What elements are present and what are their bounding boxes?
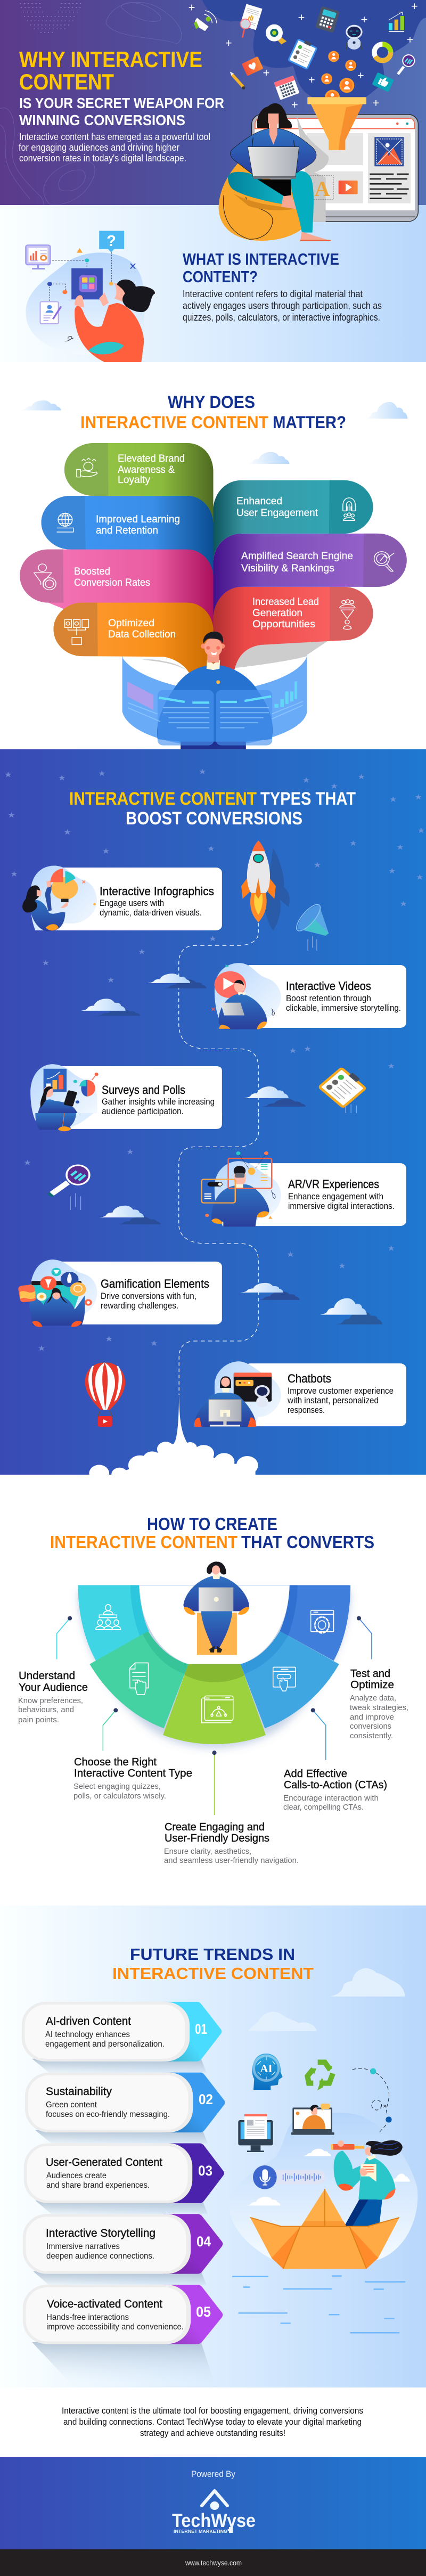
pill 05 text: improve accessibility and convenience.	[46, 2323, 184, 2332]
ribbon: optimized data	[54, 603, 214, 673]
card: ar vr experiences	[202, 1151, 406, 1226]
ribbon labels: Boosted	[74, 566, 110, 577]
text: what is body	[183, 289, 382, 323]
pill 02 text	[46, 2086, 213, 2119]
heading: what is	[183, 250, 339, 286]
step: understand your audience: pain points.	[18, 1715, 59, 1724]
panel: future trends	[0, 1906, 426, 2387]
ribbon labels	[74, 453, 353, 640]
panel: why does interactive content matter	[0, 362, 426, 749]
step: choose the right type: polls, or calculators wisely.	[73, 1792, 166, 1801]
step: create engaging: Create Engaging and	[165, 1821, 265, 1833]
text: chatbots: Improve customer experience	[288, 1386, 394, 1396]
text: interactive infographics: Engage users with	[100, 898, 164, 908]
text: ar vr: AR/VR Experiences	[288, 1177, 379, 1191]
ribbon labels: Optimized	[108, 618, 154, 629]
step: create engaging: and seamless user-friendly navigation.	[164, 1856, 299, 1865]
icon: thumbs up tile	[372, 72, 394, 92]
pill 03 text: 03	[198, 2163, 212, 2179]
step: choose the right type: Choose the Right	[74, 1756, 157, 1768]
logo: techwyse: INTERNET MARKETING	[174, 2529, 227, 2534]
text: interactive infographics: Interactive Infographics	[100, 885, 214, 898]
conclusion text	[62, 2406, 363, 2438]
icon: poll clipboard	[320, 1066, 368, 1107]
ribbon labels: and Retention	[96, 525, 158, 536]
heading: future trends	[112, 1945, 314, 1983]
ai head circuits	[254, 2056, 278, 2081]
heading: what is: WHAT IS INTERACTIVE	[183, 250, 339, 268]
pill 04 text: 04	[196, 2234, 211, 2250]
ribbon: improved learning	[42, 496, 214, 588]
step: create engaging: Ensure clarity, aesthetics,	[164, 1847, 251, 1856]
hero title	[19, 47, 224, 128]
step: choose the right type: Interactive Content Type	[74, 1768, 192, 1779]
step: understand your audience: Your Audience	[19, 1682, 88, 1694]
card: interactive videos	[211, 963, 406, 1029]
pill 02	[25, 2073, 225, 2132]
text: gamification	[101, 1277, 209, 1311]
heading: what is: CONTENT?	[183, 267, 258, 286]
pill 05 text: 05	[196, 2304, 211, 2320]
text: chatbots: responses.	[288, 1405, 325, 1415]
hero intro text: Interactive content has emerged as a powerful tool	[19, 132, 210, 142]
pill 03 text: Audiences create	[46, 2171, 106, 2180]
pill 01 text: AI-driven Content	[46, 2015, 131, 2027]
boat illustration	[229, 2054, 417, 2269]
pill 02 text: Sustainability	[46, 2086, 112, 2098]
heading: how to create	[50, 1514, 374, 1552]
stars, path and props lower	[18, 1113, 406, 1482]
ribbon labels: Elevated Brand	[118, 453, 185, 464]
step: add effective ctas: Encourage interaction with	[283, 1794, 379, 1803]
logo: techwyse	[172, 2491, 256, 2534]
step: add effective ctas: Calls-to-Action (CTAs)	[284, 1779, 387, 1791]
illustration: hero woman, funnel and icons	[189, 0, 426, 241]
icon: donut chart	[374, 44, 391, 61]
segment: test optimize	[280, 1585, 350, 1661]
pill shadows	[32, 2059, 215, 2383]
hero title: WHY INTERACTIVE	[19, 47, 202, 72]
hero title: WINNING CONVERSIONS	[19, 112, 185, 128]
fan diagram	[57, 1561, 372, 1815]
pill 03 text: User-Generated Content	[46, 2156, 162, 2169]
website url: www.techwyse.com	[185, 2559, 242, 2567]
icon: glass funnel	[292, 902, 329, 951]
logo: techwyse: TechWyse	[172, 2509, 256, 2531]
text: ar vr: Enhance engagement with	[288, 1192, 383, 1201]
text: interactive videos	[286, 979, 401, 1013]
text: surveys and polls: Gather insights while increasing	[102, 1097, 215, 1107]
step: test and optimize	[350, 1668, 408, 1740]
ribbon: elevated brand	[64, 443, 214, 538]
icon: document and magnifier	[240, 4, 263, 38]
panel: hero	[0, 0, 426, 206]
ribbon: enhanced engagement	[214, 480, 373, 561]
dark blob	[202, 0, 426, 97]
ribbon: amplified search	[214, 534, 407, 616]
text: what is body: quizzes, polls, calculators, or interactive infographics.	[183, 312, 380, 323]
text: gamification: Gamification Elements	[101, 1277, 209, 1290]
icon: monitor with article	[238, 2114, 273, 2152]
step: choose the right type: Select engaging quizzes,	[73, 1782, 161, 1791]
funnel	[307, 97, 366, 150]
pill 01	[22, 2002, 222, 2062]
icon: magnifier	[50, 1165, 89, 1210]
step: add effective ctas: clear, compelling CTAs.	[283, 1803, 364, 1812]
segment: add ctas	[241, 1631, 339, 1728]
ribbons and figure	[19, 400, 407, 749]
hero title: CONTENT	[19, 69, 114, 94]
rocket exhaust cloud	[89, 1394, 258, 1482]
pill 01 text	[45, 2015, 207, 2049]
step: test and optimize: Test and	[350, 1668, 390, 1680]
clouds upper	[80, 974, 306, 1107]
stars, path and props upper	[5, 768, 424, 1121]
icon: clipboard	[289, 37, 318, 69]
pill 02 text: Green content	[46, 2100, 97, 2109]
hero intro text: for engaging audiences and driving higher	[19, 142, 179, 153]
ribbon labels: Increased Lead	[252, 596, 319, 608]
ribbon labels: Loyalty	[118, 475, 151, 486]
step: test and optimize: Analyze data,	[350, 1694, 396, 1703]
segment: create designs	[163, 1664, 266, 1744]
icon: gear search	[266, 24, 286, 44]
step: add effective ctas	[283, 1768, 387, 1812]
ai label: AI	[260, 2062, 273, 2075]
heading: types: INTERACTIVE CONTENT	[69, 789, 257, 809]
heading: types: TYPES THAT	[260, 789, 356, 809]
clouds lower	[99, 1206, 382, 1324]
icon: laptop with presenter	[291, 2104, 334, 2135]
text: what is body: actively engages users through participation, such as	[183, 300, 382, 311]
card: chatbots	[194, 1361, 406, 1427]
heading: future trends: INTERACTIVE CONTENT	[112, 1964, 314, 1983]
ribbon labels: Visibility & Rankings	[241, 563, 334, 574]
icon: calculator	[315, 6, 340, 33]
pill 05 text: Hands-free interactions	[46, 2313, 129, 2322]
heading: types	[69, 789, 356, 829]
powered by: Powered By	[191, 2469, 235, 2479]
icon: robot	[346, 25, 363, 50]
step: create engaging: User-Friendly Designs	[165, 1833, 269, 1844]
icon: megaphone	[194, 11, 217, 31]
icon: ai head	[252, 2054, 283, 2090]
text: surveys and polls: Surveys and Polls	[102, 1083, 185, 1097]
panel: footer branding	[0, 2457, 426, 2549]
step: understand your audience: behaviours, and	[18, 1705, 74, 1714]
step: add effective ctas: Add Effective	[284, 1768, 347, 1780]
step: create engaging	[164, 1821, 299, 1865]
pill 05	[23, 2285, 223, 2344]
card: surveys and polls lower	[35, 1113, 222, 1131]
sky, pills	[22, 1968, 405, 2383]
screen held by person	[122, 655, 307, 747]
ribbon labels: User Engagement	[236, 508, 318, 519]
text: chatbots: with instant, personalized	[287, 1396, 379, 1405]
clouds small	[246, 2149, 410, 2205]
heading: why matter: WHY DOES	[168, 392, 255, 412]
pill 02 text: 02	[199, 2091, 213, 2107]
ribbon labels: Opportunities	[252, 619, 315, 630]
heading: future trends: FUTURE TRENDS IN	[130, 1945, 295, 1964]
connector lines	[57, 1618, 372, 1815]
ribbon labels: Data Collection	[108, 629, 176, 640]
ribbon: increased lead	[214, 587, 373, 674]
question mark: ?	[106, 233, 116, 250]
ribbon labels: Conversion Rates	[74, 577, 150, 588]
heading: why matter: INTERACTIVE CONTENT	[80, 413, 268, 432]
step: understand your audience: Know preferences,	[18, 1696, 83, 1705]
segment: choose type	[89, 1631, 189, 1728]
step: test and optimize: tweak strategies,	[350, 1703, 408, 1712]
panel: website bar	[0, 2549, 426, 2576]
text: ar vr	[288, 1177, 395, 1211]
card: gamification elements	[18, 1260, 222, 1327]
text: ar vr: immersive digital interactions.	[288, 1201, 395, 1211]
text: interactive videos: Boost retention through	[286, 994, 371, 1003]
text: gamification: Drive conversions with fun,	[101, 1291, 196, 1301]
person holding screen	[127, 632, 303, 749]
woman with laptop	[183, 1561, 249, 1655]
text: interactive videos: Interactive Videos	[286, 979, 371, 993]
text: what is body: Interactive content refers to digital material that	[183, 289, 363, 299]
hero intro text: conversion rates in today's digital landscape.	[19, 153, 186, 163]
step: test and optimize: and improve	[350, 1713, 394, 1722]
ribbon: boosted conversion	[20, 550, 214, 639]
clouds	[19, 400, 407, 464]
water lines	[232, 2276, 405, 2289]
text: surveys and polls: audience participation.	[102, 1107, 184, 1116]
browser screen	[252, 115, 418, 222]
icon: heart tile	[242, 56, 264, 76]
segment: understand audience	[78, 1585, 149, 1662]
conclusion text: strategy and achieve outstanding results!	[140, 2428, 285, 2438]
heading: why matter: MATTER?	[273, 413, 346, 432]
panel: how to create	[0, 1475, 426, 1906]
icon: bar chart	[389, 12, 404, 31]
icon: voice pill	[253, 2165, 325, 2189]
conclusion text: and building connections. Contact TechWyse today to elevate your digital marketing	[63, 2417, 362, 2427]
pill 04 text	[46, 2227, 211, 2261]
heading: how to create: INTERACTIVE CONTENT	[50, 1532, 237, 1552]
illustration: woman with calculator	[26, 231, 155, 362]
pill 01 text: 01	[195, 2021, 207, 2037]
plus marks	[189, 3, 417, 108]
icon: purple magnifier	[398, 55, 414, 74]
text: chatbots	[287, 1372, 394, 1415]
heading: why matter	[80, 392, 346, 432]
pill 04 text: Immersive narratives	[46, 2242, 120, 2251]
icon: recycle	[307, 2062, 333, 2089]
pill 02 text: focuses on eco-friendly messaging.	[46, 2110, 170, 2119]
pill 03 text: and share brand experiences.	[46, 2181, 150, 2190]
pill 01 text: engagement and personalization.	[45, 2040, 165, 2049]
step: understand your audience	[18, 1670, 88, 1724]
card: interactive infographics	[22, 866, 222, 931]
icon: calendar	[274, 76, 299, 100]
hero intro text	[19, 132, 210, 163]
pill 04	[23, 2214, 223, 2274]
woman on bean bag	[219, 103, 331, 241]
pill 05 text: Voice-activated Content	[47, 2298, 162, 2310]
hero title: IS YOUR SECRET WEAPON FOR	[19, 95, 224, 111]
ribbon labels: Amplified Search Engine	[241, 551, 353, 562]
text: surveys and polls	[102, 1083, 215, 1116]
conclusion text: Interactive content is the ultimate tool for boosting engagement, driving conversions	[62, 2406, 363, 2416]
pill 04 text: deepen audience connections.	[46, 2252, 154, 2261]
step: test and optimize: conversions	[350, 1722, 391, 1731]
heading: how to create: THAT CONVERTS	[241, 1532, 374, 1552]
ribbon labels: Improved Learning	[96, 514, 180, 525]
text: interactive infographics	[100, 885, 214, 918]
text: interactive videos: clickable, immersive storytelling.	[286, 1003, 401, 1013]
pill 04 text: Interactive Storytelling	[46, 2227, 155, 2239]
pill 03	[24, 2143, 224, 2203]
text: chatbots: Chatbots	[288, 1372, 331, 1385]
pill 01 text: AI technology enhances	[45, 2030, 130, 2039]
card: surveys and polls upper	[30, 1064, 222, 1121]
pill 05 text	[46, 2298, 211, 2332]
icon: hot air balloon	[85, 1362, 125, 1427]
panel: what is interactive content	[0, 205, 426, 362]
orbit path	[353, 2068, 389, 2132]
woman on boat	[331, 2140, 403, 2228]
paper boat	[250, 2189, 399, 2269]
heading: how to create: HOW TO CREATE	[147, 1514, 277, 1534]
text: interactive infographics: dynamic, data-driven visuals.	[100, 908, 202, 918]
panel: interactive content types	[0, 749, 426, 1482]
step: test and optimize: consistently.	[350, 1731, 393, 1740]
letter A on screen: A	[315, 177, 330, 201]
step: choose the right type	[73, 1756, 192, 1801]
ribbon labels: Enhanced	[236, 496, 282, 507]
icon: pencil	[230, 71, 245, 89]
step: test and optimize: Optimize	[350, 1679, 394, 1691]
ribbon labels: Generation	[252, 608, 302, 619]
icon: audience coins	[321, 51, 356, 105]
icon: rocket	[241, 840, 290, 930]
text: gamification: rewarding challenges.	[101, 1301, 178, 1311]
heading: types: BOOST CONVERSIONS	[126, 808, 302, 829]
pill 03 text	[46, 2156, 212, 2190]
step: understand your audience: Understand	[19, 1670, 75, 1682]
ribbon labels: Awareness &	[118, 464, 175, 476]
